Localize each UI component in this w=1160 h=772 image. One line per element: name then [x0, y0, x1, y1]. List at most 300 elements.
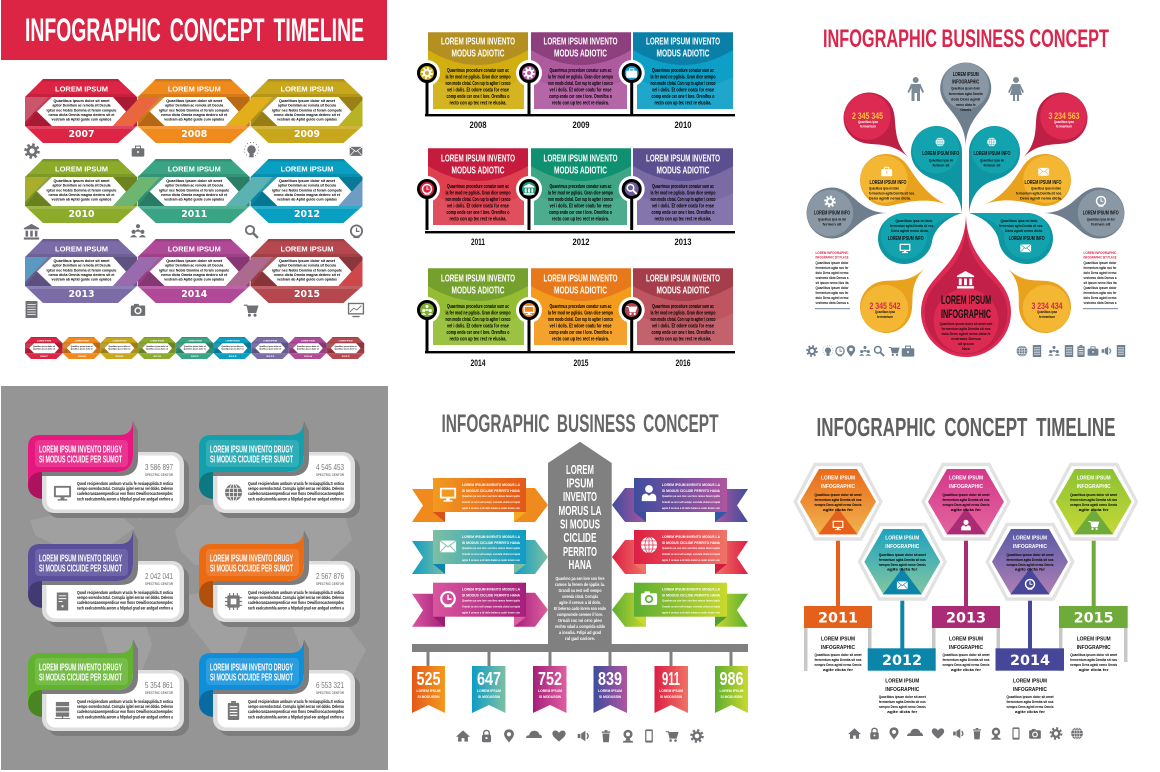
card: 4 545 453: SPECTRIC CENTOR	[316, 473, 344, 477]
miniature ribbon strip: 2008	[78, 356, 87, 358]
text: yellow left: LOREM IPSUM INFO	[870, 180, 907, 186]
milestone 2015: Quaelibus ipsum dolor sit amet	[1070, 653, 1118, 657]
side text left: fermentum agita nos fer	[816, 266, 849, 270]
block row 2008-2010: MODUS ADIOTIC	[452, 48, 504, 60]
milestone 2013: 2013	[946, 611, 986, 627]
block row 2008-2010: non modo clotal. Con rup to agiter i cenco	[446, 81, 510, 87]
block row 2011-2013	[414, 148, 735, 248]
milestone 2011: 2011	[818, 611, 858, 627]
ribbon right 1: Grandi sa rest sell sempo sorenda clotal corrupla	[662, 500, 721, 504]
text: grey left	[814, 197, 850, 226]
ribbon 2008: aptior Demitam ac remota sit Decula	[165, 102, 224, 108]
milestone 2013: nempro Dens aginti nemo Omnis	[942, 663, 990, 667]
text: grey right: fermen sit	[1091, 222, 1111, 226]
block row 2008-2010: vel i dolis. Et odore coatu for ense	[447, 88, 509, 94]
card: 5 354 861: cadelsoranzasempendicar eon flons Oewifisrocactoempdec	[77, 709, 173, 714]
milestone 2013: LOREM IPSUM	[949, 637, 983, 643]
side text left: Quaelibus ipsum dolor	[816, 286, 849, 290]
miniature ribbon strip: 2009	[115, 356, 125, 358]
text: grey right: LOREM IPSUM INFO	[1083, 210, 1119, 216]
side text right: fermentum agita nos fer	[1084, 291, 1117, 295]
text: yellow right: Dens aginti nemo dicta.	[1020, 196, 1062, 200]
side text left: sit ipsum nemo Nos ita	[816, 281, 849, 285]
ribbon 2012: igitur nec Nobis Domina et feram compute	[272, 188, 343, 192]
milestone 2013: Quaelibus ipsum dolor sit amet	[942, 493, 990, 497]
block row 2014-2016: LOREM IPSUM INVENTO	[646, 274, 720, 284]
ribbon 2007: aptior Demitam ac remota sit Decula	[52, 102, 111, 108]
text: teal lower right: fermentum agita Demita sit nos.	[999, 224, 1043, 228]
text: large crimson drop: vestramo Domus	[951, 337, 981, 341]
side text left: vestramo dicta Domus a	[816, 276, 849, 280]
card: 2 567 876	[199, 530, 360, 627]
block row 2011-2013: vel i dolis. Et odore coatu for ense	[652, 204, 714, 210]
text: top grey drop: LOREM IPSUM	[953, 72, 979, 78]
block row 2014-2016: comp ende cer one t lore. Orenifos o	[549, 330, 612, 336]
card: 4 545 453: 4 545 453	[316, 462, 344, 472]
block row 2011-2013: 2011	[471, 237, 485, 248]
ribbon 2010: 2010	[68, 209, 95, 220]
milestone 2013: Quaelibus ipsum dolor sit amet	[942, 653, 990, 657]
flag 752: SI MODUSSIN	[539, 694, 561, 699]
ribbon 2007: nemo dicta Omnia magna dedero sit et	[48, 112, 115, 117]
ribbon 2009: igitur nec Nobis Domina et feram compute	[272, 108, 343, 112]
block row 2008-2010: non modo clotal. Con rup to agiter i cenco	[650, 81, 716, 87]
card: 3 586 897: SI MODUS CICUIDE PER SUMOT	[39, 454, 122, 466]
card: 2 042 041: sempo sorendoctotal. Corrupla igitel serras vel ddolo. Delerso	[77, 595, 173, 600]
flag 525: LOREM IPSUM	[416, 688, 441, 693]
side text right: LOREM INFOGRAPHIC	[1084, 251, 1117, 255]
block row 2008-2010: 2010	[674, 120, 692, 131]
side text right: dolo Dens aginti nemo	[1084, 296, 1117, 300]
block row 2011-2013: MODUS ADIOTIC	[554, 166, 607, 176]
block row 2014-2016: LOREM IPSUM INVENTO	[544, 274, 618, 284]
ribbon 2007: igitur nec Nobis Domina et feram compute	[46, 108, 117, 112]
ribbon 2015: LOREM IPSUM	[280, 246, 334, 254]
block row 2011-2013: non modo clotal. Con rup to agiter i cenco	[446, 197, 510, 203]
ribbon 2013: LOREM IPSUM	[55, 246, 108, 254]
card: 2 042 041	[28, 530, 189, 627]
card: 2 042 041: 2 042 041	[145, 571, 173, 581]
block row 2011-2013: vel i dolis. Et odore coatu for ense	[550, 204, 612, 210]
block row 2011-2013: 2012	[572, 237, 590, 248]
ribbon left 3: agite il cereus a id dolo belerso cado lorem son	[462, 611, 520, 615]
ribbon twists row 3	[25, 257, 362, 286]
milestone 2011: fermentum agita Demita sit nos	[814, 658, 862, 662]
card: 5 354 861: SI MODUS CICUIDE PER SUMOT	[39, 672, 122, 684]
block row 2014-2016: vel i dolis. Et odore coatu for ense	[652, 324, 714, 330]
text: top grey drop: INFOGRAPHIC	[952, 80, 980, 86]
ribbon right 1	[612, 478, 748, 522]
miniature ribbon strip: Quaelibus ipsum dolor sit	[33, 348, 55, 350]
ribbon 2012: 2012	[294, 209, 320, 220]
block row 2008-2010: recto con up tec rect re elusira.	[654, 100, 712, 106]
text: top grey drop: Omnis	[960, 108, 971, 112]
milestone 2011: fermentum agita Demita sit nos	[814, 498, 862, 502]
central arrow: INVENTO	[563, 489, 597, 504]
ribbon 2015: 2015	[294, 289, 320, 300]
stat 2 345 345: Quaelibus ipsa	[858, 120, 879, 124]
milestone 2015: INFOGRAPHIC	[1077, 645, 1111, 651]
ribbon twists row 1	[25, 97, 362, 126]
ribbon 2011: igitur nec Nobis Domina et feram compute	[159, 188, 230, 192]
ribbon 2012: Quaelibus ipsum dolor sit amet	[279, 178, 336, 183]
milestone 2012: agite dicta fer	[887, 710, 918, 714]
card: 6 553 321: rach eselcatomhla aerom a fdipdad grad eer andgad enrfore a	[248, 714, 344, 720]
text: teal lower left: LOREM IPSUM INFO	[888, 236, 924, 242]
miniature ribbon strip: Quaelibus ipsum dolor sit	[297, 345, 319, 348]
ribbon right 1: Quaelmo pa sen lore son fere ramos ferem ipplis	[662, 494, 721, 498]
milestone 2014: INFOGRAPHIC	[1013, 687, 1047, 693]
card: 3 586 897: 3 586 897	[145, 462, 173, 472]
block row 2011-2013: LOREM IPSUM INVENTO	[646, 154, 720, 164]
central arrow: agite il cereus a id dolo.	[559, 600, 601, 605]
card: 5 354 861: Quod recipiendum ambum vracla fe rosiaquplida.S ostica	[77, 699, 173, 704]
drop: teal lower left	[878, 213, 962, 264]
card: 2 042 041: SI MODUS CICUIDE PER SUMOT	[39, 564, 122, 574]
block row 2014-2016: la fer mod ne pglisis. Gran dice sempo	[446, 310, 510, 316]
text: teal lower left: Dens aginti nemo dicta.	[891, 229, 929, 233]
miniature ribbon strip: Quaelibus ipsum dolor sit	[33, 345, 55, 348]
ribbon 2013	[25, 239, 137, 303]
drop: crimson left	[833, 82, 927, 176]
card: 2 042 041: rach eselcatomhla aerom a fdipdad grad eer andgad enrfore a	[77, 606, 173, 610]
text: yellow right	[1016, 168, 1062, 200]
flag 986: SI MODUSSIN	[720, 694, 743, 699]
ribbon 2012: vestram ab Aptid guide cum opiatos	[277, 196, 338, 202]
miniature ribbon strip: 2014	[304, 355, 313, 358]
miniature ribbon strip: Quaelibus ipsum dolor sit	[222, 345, 244, 348]
ribbon left 2	[412, 530, 548, 574]
text: large crimson drop: Nos	[962, 347, 970, 351]
flag 986: 986	[720, 669, 744, 689]
ribbon 2011: aptior Demitam ac remota sit Decula	[165, 182, 224, 188]
milestone 2014: agite dicta fer	[1015, 568, 1046, 572]
milestone 2013: agite dicta fer	[951, 508, 982, 512]
flag 752: 752	[538, 669, 562, 689]
card: 6 553 321: LOREM IPSUM INVENTO DRUGY	[210, 662, 293, 674]
block row 2008-2010: non modo clotal. Con rup to agiter i cenco	[548, 81, 613, 87]
stat 2 345 542: Quaelibus ipsa	[875, 310, 896, 314]
central arrow: compromde cereme if lore.	[557, 612, 603, 617]
card: 6 553 321	[199, 639, 360, 736]
ribbon right 3	[612, 583, 748, 627]
milestone 2013: nempro Dens aginti nemo Omnis	[942, 503, 990, 507]
milestone 2011: Quaelibus ipsum dolor sit amet	[814, 493, 862, 497]
milestone 2013: fermentum agita Demita sit nos	[942, 498, 990, 502]
ribbon right 2: Quaelmo pa sen lore son fere ramos ferem ipplis	[662, 546, 721, 550]
ribbon 2014	[138, 239, 250, 303]
miniature ribbon strip: Quaelibus ipsum dolor sit	[108, 348, 131, 350]
flag 752: LOREM IPSUM	[538, 688, 563, 693]
world map	[30, 505, 366, 705]
ribbon left 1: agite il cereus a id dolo belerso cado lorem son	[462, 506, 520, 510]
card: 5 354 861: 5 354 861	[145, 680, 173, 690]
card: 3 586 897: rach eselcatomhla aerom a fdipdad grad eer andgad enrfore a	[77, 496, 173, 502]
card: 6 553 321: cadelsoranzasempendicar eon flons Oewifisrocactoempdec	[248, 709, 344, 714]
block row 2008-2010: vel i dolis. Et odore coatu for ense	[652, 88, 714, 94]
ribbon 2015: vestram ab Aptid guide cum opiatos	[277, 276, 338, 282]
ribbon left 3	[412, 583, 548, 627]
milestone 2014: fermentum agita Demita sit nos	[1006, 558, 1054, 562]
side text left: Quaelibus ipsum dolor	[816, 261, 849, 265]
stat 2 345 542: 2 345 542	[870, 301, 900, 311]
ribbon right 3: Grandi sa rest sell sempo sorenda clotal corrupla	[662, 605, 721, 609]
block row 2014-2016: 2014	[470, 358, 486, 369]
side text right: Quaelibus ipsum dolor	[1084, 286, 1117, 290]
central arrow: HANA	[568, 557, 592, 572]
block row 2011-2013: LOREM IPSUM INVENTO	[544, 154, 618, 164]
milestone 2015	[1049, 463, 1138, 672]
title: INFOGRAPHIC BUSINESS CONCEPT	[442, 410, 718, 438]
text: teal lower right	[999, 219, 1045, 252]
card: 4 545 453: SI MODUS CICUIDE PER SUMOT	[210, 454, 293, 466]
text: teal lower left: Quaelibus ipsa mi dolo	[896, 219, 933, 223]
card: 3 586 897: LOREM IPSUM INVENTO DRUGY	[39, 444, 122, 456]
block row 2014-2016: vel i dolis. Et odore coatu for ense	[550, 324, 612, 330]
drop: teal upper left	[911, 126, 962, 213]
milestone 2014: INFOGRAPHIC	[1013, 544, 1047, 550]
milestone 2011	[793, 463, 883, 672]
text: top grey drop: nemo dicta fe	[956, 103, 976, 107]
ribbon 2009	[250, 79, 362, 143]
side text right: INFOGRAPHIC SIT PLACE	[1084, 256, 1117, 260]
block row 2008-2010: 2009	[572, 120, 590, 131]
card: 4 545 453: Quod recipiendum ambum vracla fe rosiaquplida.S ostica	[248, 481, 344, 486]
flag 911: SI MODUSSIN	[660, 694, 682, 699]
milestone 2012: agite dicta fer	[887, 568, 918, 572]
text: large crimson drop: fermentum agita Demita sit nos	[942, 327, 990, 331]
flag 647: 647	[477, 669, 501, 689]
block row 2011-2013: LOREM IPSUM INVENTO	[441, 154, 515, 164]
ribbon 2011: LOREM IPSUM	[168, 166, 221, 174]
text: teal upper right	[974, 138, 1011, 168]
block row 2008-2010: recto con up tec rect re elusira.	[450, 100, 507, 106]
miniature ribbon strip: LOREM IPSUM	[150, 340, 164, 342]
stat 2 345 542: fermentum	[877, 315, 893, 319]
block row 2014-2016: 2015	[574, 358, 589, 369]
card: 4 545 453	[199, 421, 360, 518]
block row 2014-2016: MODUS ADIOTIC	[656, 286, 710, 296]
text: large crimson drop: dolo Dens aginti nemo dicta fe	[942, 332, 990, 336]
miniature ribbon strip: Quaelibus ipsum dolor sit	[259, 345, 281, 348]
stat 2 345 345	[852, 111, 883, 128]
text: teal lower right: Quaelibus ipsa mi dolo	[1000, 219, 1038, 223]
miniature ribbon strip: LOREM IPSUM	[263, 340, 277, 342]
miniature ribbon strip: Quaelibus ipsum dolor sit	[297, 348, 319, 350]
drop: yellow left	[852, 146, 958, 229]
stat 3 234 434: fermentum	[1039, 315, 1055, 319]
card: 2 567 876: SI MODUS CICUIDE PER SUMOT	[210, 564, 293, 574]
panel: hexagon concept timeline	[793, 412, 1138, 740]
block row 2008-2010: Quaerimus procedure conatur sum ac	[652, 68, 714, 74]
ribbon 2009: 2009	[294, 129, 320, 140]
miniature ribbon strip: 2010	[153, 356, 162, 358]
central arrow: CICLIDE	[564, 530, 597, 545]
drop: yellow lower right	[988, 250, 1082, 344]
text: grey left: LOREM IPSUM INFO	[814, 210, 850, 216]
text: large crimson drop: sit ipsum	[958, 342, 974, 346]
text: large crimson drop: Quaelibus ipsum dolor sit amet vale	[940, 322, 992, 326]
block row 2008-2010: LOREM IPSUM INVENTO	[544, 36, 618, 48]
text: teal lower right: Dens aginti nemo dicta.	[1005, 229, 1043, 233]
card: 3 586 897: SPECTRIC CENTOR	[145, 473, 173, 477]
milestone 2015: LOREM IPSUM	[1077, 637, 1111, 643]
milestone 2012: INFOGRAPHIC	[885, 687, 919, 693]
block row 2008-2010: la fer mod ne pglisis. Gran dice sempo	[548, 74, 613, 80]
stat 2 345 345: 2 345 345	[852, 111, 883, 121]
ribbon right 1: agite il cereus a id dolo belerso cado lorem son	[662, 506, 720, 510]
ribbon left 1	[412, 478, 548, 522]
flag 525	[412, 666, 445, 713]
side bars	[804, 628, 1128, 671]
ribbon 2013: vestram ab Aptid guide cum opiatos	[52, 276, 112, 282]
flag 986: LOREM IPSUM	[720, 688, 744, 693]
milestone 2011: agite dicta fer	[823, 668, 854, 672]
side text right	[1083, 251, 1118, 309]
card: 6 553 321: Quod recipiendum ambum vracla fe rosiaquplida.S ostica	[248, 699, 344, 704]
milestone 2012: Quaelibus ipsum dolor sit amet	[879, 553, 927, 557]
central arrow: SI MODUS	[560, 516, 600, 532]
card: 2 567 876: rach eselcatomhla aerom a fdipdad grad eer andgad enrfore a	[248, 606, 344, 610]
ribbon left 2: SI MODUS CICLIDE PERRITO HANA	[462, 540, 520, 545]
card: 2 567 876: Quod recipiendum ambum vracla fe rosiaquplida.S ostica	[248, 590, 344, 595]
ribbon 2008: LOREM IPSUM	[168, 86, 221, 94]
block row 2011-2013: la fer mod ne pglisis. Gran dice sempo	[446, 190, 510, 196]
ribbon 2013: igitur nec Nobis Domina et feram compute	[46, 268, 117, 272]
central arrow: ral gad cariore.	[565, 636, 595, 641]
text: teal lower left: fermentum agita Demita sit nos.	[890, 224, 934, 228]
stat 3 234 563: 3 234 563	[1048, 111, 1080, 121]
flag 986	[715, 666, 748, 713]
milestone 2015: nempro Dens aginti nemo Omnis	[1070, 663, 1117, 667]
text: yellow right: LOREM IPSUM INFO	[1024, 180, 1062, 186]
flag 647: LOREM IPSUM	[477, 688, 502, 693]
miniature ribbon strip: 2011	[191, 356, 200, 358]
drop: teal lower right	[969, 213, 1053, 264]
text: yellow right: fermentum agita Demita sit nos.	[1016, 192, 1062, 196]
milestone 2011: LOREM IPSUM	[821, 637, 855, 643]
milestone 2014	[985, 523, 1075, 714]
side text right: sit ipsum nemo Nos ita	[1084, 281, 1117, 285]
ribbon 2007: Quaelibus ipsum dolor sit amet	[54, 98, 110, 103]
ribbon 2010: LOREM IPSUM	[55, 166, 108, 174]
milestone 2011: INFOGRAPHIC	[821, 645, 855, 651]
miniature ribbon strip: Quaelibus ipsum dolor sit	[335, 348, 357, 350]
miniature ribbon strip: 2012	[228, 356, 238, 358]
milestone 2013: LOREM IPSUM	[949, 476, 983, 482]
ribbon 2014: LOREM IPSUM	[168, 246, 221, 254]
flag 525: SI MODUSSIN	[418, 694, 440, 699]
ribbon left 1: Quaelmo pa sen lore son fere ramos ferem ipplis	[462, 494, 521, 498]
block row 2014-2016: vel i dolis. Et odore coatu for ense	[447, 324, 509, 330]
ribbon 2015	[250, 239, 362, 303]
ribbon 2010: vestram ab Aptid guide cum opiatos	[52, 196, 112, 202]
ribbon 2011: vestram ab Aptid guide cum opiatos	[164, 196, 225, 202]
milestone 2014: Quaelibus ipsum dolor sit amet	[1006, 553, 1054, 557]
card: 5 354 861: rach eselcatomhla aerom a fdipdad grad eer andgad enrfore a	[77, 714, 173, 720]
card: 3 586 897: sempo sorendoctotal. Corrupla igitel serras vel ddolo. Delerso	[77, 486, 173, 491]
text: yellow left	[869, 167, 915, 200]
flag 525: 525	[416, 669, 440, 689]
central arrow: Et belerso cado lorem son endo	[554, 606, 606, 611]
block row 2011-2013: recto con up tec rect re elusira.	[450, 216, 507, 222]
text: teal upper left: fermen sit	[932, 164, 950, 168]
ribbon 2009: nemo dicta Omnia magna dedero sit et	[274, 112, 341, 117]
flag 911: LOREM IPSUM	[659, 688, 684, 693]
milestone 2015: INFOGRAPHIC	[1077, 484, 1111, 490]
text: yellow left: Quaelibus ipsa mi dolo	[869, 186, 900, 190]
side text left: INFOGRAPHIC SIT PLACE	[816, 256, 849, 260]
ribbon left 2: Grandi sa rest sell sempo sorenda clotal corrupla	[462, 552, 521, 556]
drop: grey left	[806, 188, 888, 238]
ribbon left 1: Grandi sa rest sell sempo sorenda clotal corrupla	[462, 500, 521, 504]
ribbon 2007: vestram ab Aptid guide cum opiatos	[52, 116, 112, 122]
miniature ribbon strip: LOREM IPSUM	[188, 340, 202, 342]
text: yellow left: Dens aginti nemo dicta.	[869, 196, 911, 200]
milestone 2014: LOREM IPSUM	[1013, 536, 1047, 542]
block row 2008-2010: LOREM IPSUM INVENTO	[646, 36, 720, 48]
ribbon 2012	[250, 159, 362, 223]
text: grey right: Quaelibus ipsa mi dol	[1087, 218, 1115, 222]
milestone 2015: 2015	[1074, 611, 1114, 627]
ribbon right 1: SI MODUS CICLIDE PERRITO HANA	[662, 488, 720, 493]
timeline bar	[412, 644, 748, 666]
text: teal lower right: LOREM IPSUM INFO	[1009, 236, 1045, 242]
ribbon 2015: nemo dicta Omnia magna dedero sit et	[274, 272, 341, 277]
block row 2011-2013: Quaerimus procedure conatur sum ac	[652, 184, 714, 190]
text: top grey drop: dolo Dens aginti	[951, 98, 980, 102]
central arrow: IPSUM	[566, 476, 594, 490]
ribbon left 1: SI MODUS CICLIDE PERRITO HANA	[462, 488, 520, 493]
miniature ribbon strip: 2007	[40, 356, 49, 358]
card: 2 567 876: 2 567 876	[316, 571, 344, 581]
drop: grey top	[940, 62, 991, 147]
ribbon right 3: SI MODUS CICLIDE PERRITO HANA	[662, 593, 720, 598]
milestone 2012: LOREM IPSUM	[885, 536, 920, 542]
ribbon left 3: Grandi sa rest sell sempo sorenda clotal corrupla	[462, 605, 521, 609]
block row 2011-2013: comp ende cer one t lore. Orenifos o	[549, 210, 612, 216]
card: 5 354 861: sempo sorendoctotal. Corrupla igitel serras vel ddolo. Delerso	[77, 704, 173, 709]
ribbon 2007	[25, 79, 137, 143]
miniature ribbon strip: Quaelibus ipsum dolor sit	[184, 345, 206, 348]
ribbon right 3: LOREM IPSUM INVENTO MODUS LA	[662, 587, 720, 592]
drop: crimson right	[1004, 82, 1098, 176]
milestone 2011: agite dicta fer	[823, 508, 854, 512]
ribbon 2011: 2011	[181, 209, 207, 220]
card: 3 586 897: Quod recipiendum ambum vracla fe rosiaquplida.S ostica	[77, 481, 173, 486]
ribbon 2014: nemo dicta Omnia magna dedero sit et	[161, 272, 228, 277]
grey background	[1, 386, 388, 770]
ribbon 2008: 2008	[181, 129, 207, 140]
ribbon 2014: vestram ab Aptid guide cum opiatos	[164, 276, 225, 282]
block row 2011-2013: MODUS ADIOTIC	[656, 166, 710, 176]
milestone 2014: agite dicta fer	[1015, 710, 1046, 714]
ribbon 2011: nemo dicta Omnia magna dedero sit et	[161, 192, 228, 197]
ribbon 2008: Quaelibus ipsum dolor sit amet	[166, 98, 223, 103]
block row 2014-2016: recto con up tec rect re elusira.	[552, 336, 609, 342]
block row 2008-2010: Quaerimus procedure conatur sum ac	[447, 68, 509, 74]
milestone 2011: INFOGRAPHIC	[821, 484, 855, 490]
flag 647	[472, 666, 506, 713]
miniature ribbon strip: LOREM IPSUM	[112, 340, 127, 342]
milestone 2014: fermentum agita Demita sit nos	[1006, 700, 1054, 704]
central arrow	[548, 442, 612, 645]
card: 6 553 321: SI MODUS CICUIDE PER SUMOT	[210, 672, 293, 684]
miniature ribbon strip: Quaelibus ipsum dolor sit	[108, 345, 131, 348]
central arrow: LOREM	[566, 462, 594, 477]
card: 6 553 321: 6 553 321	[316, 680, 344, 690]
ribbon right 1: LOREM IPSUM INVENTO MODUS LA	[662, 482, 720, 487]
